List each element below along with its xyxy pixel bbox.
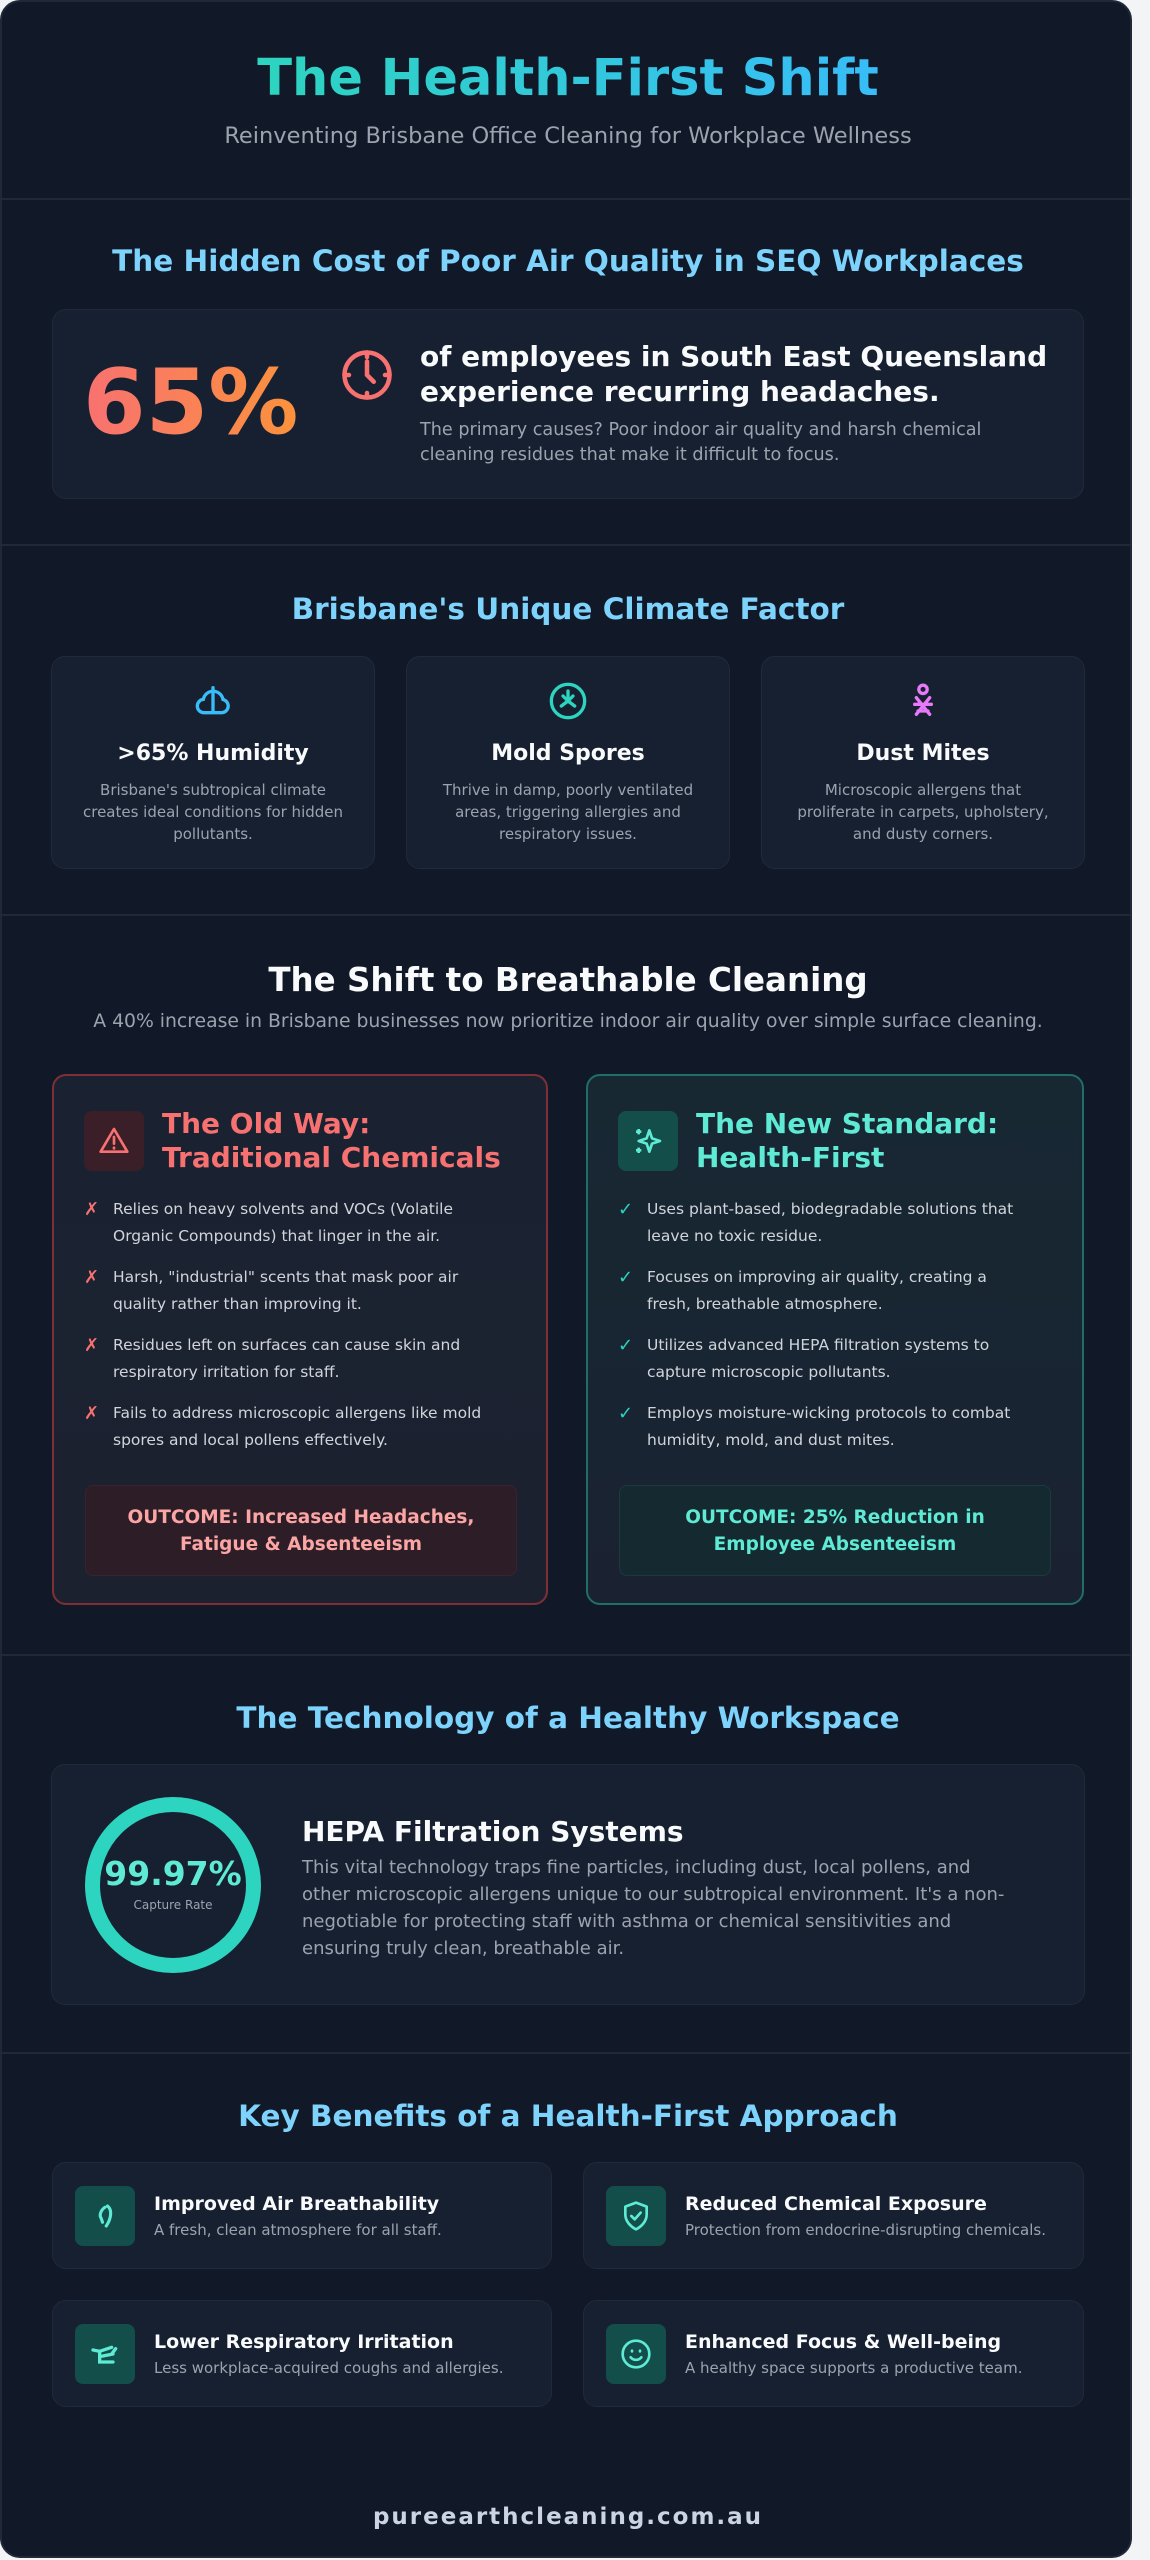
list old: Relies on heavy solvents and VOCs (Volatile Organic Compounds) that linger in the air. (113, 1200, 453, 1244)
benefit: respiratory: Lower Respiratory Irritation (154, 2331, 454, 2353)
heading: shift: The Shift to Breathable Cleaning (268, 961, 868, 999)
icon: hand (75, 2324, 135, 2384)
benefit: chemical (583, 2162, 1084, 2269)
icon: smile (606, 2324, 666, 2384)
outcome old: Fatigue & Absenteeism (180, 1534, 422, 1554)
icon: clock (342, 350, 392, 400)
outcome old (85, 1485, 517, 1576)
stat 65%: 65% (83, 350, 298, 455)
list new (618, 1199, 1013, 1448)
panel: old way: ✗ (84, 1403, 99, 1424)
description: The primary causes? Poor indoor air quality and harsh chemical cleaning residues that make it difficult to focus. (420, 420, 981, 465)
HEPA title: HEPA Filtration Systems (302, 1815, 684, 1848)
list new: Uses plant-based, biodegradable solutions that leave no toxic residue. (647, 1200, 1013, 1244)
benefit: air: A fresh, clean atmosphere for all staff. (154, 2221, 442, 2239)
panel: dust mites: Microscopic allergens that proliferate in carpets, upholstery, and dusty corners. (797, 781, 1049, 843)
icon: wind (75, 2186, 135, 2246)
panel: old way: ✗ (84, 1335, 99, 1356)
footer: pureearthcleaning.com.au (373, 2504, 763, 2530)
benefit: air: Improved Air Breathability (154, 2193, 439, 2215)
list old: Residues left on surfaces can cause skin and respiratory irritation for staff. (113, 1336, 460, 1380)
benefit: chemical: Protection from endocrine-disrupting chemicals. (685, 2221, 1046, 2239)
benefit: focus: A healthy space supports a productive team. (685, 2359, 1022, 2377)
panel: old way: ✗ (84, 1267, 99, 1288)
panel: old way (52, 1074, 548, 1605)
icon: warning (84, 1111, 144, 1171)
panel: mold: Mold Spores (491, 741, 645, 766)
HEPA text: This vital technology traps fine particles, including dust, local pollens, and other microscopic allergens unique to our subtropical environment. It's a non-negotiable for protecting staff with asthma or chemical sensitivities and ensuring truly clean, breathable air. (302, 1857, 1004, 1959)
icon: spores (550, 682, 586, 720)
list new: Employs moisture-wicking protocols to combat humidity, mold, and dust mites. (647, 1404, 1010, 1448)
ring chart (85, 1797, 261, 1973)
panel: HEPA (51, 1764, 1085, 2005)
headline: of employees in South East Queensland experience recurring headaches. (420, 340, 1047, 408)
list old (84, 1199, 481, 1448)
subtitle: Reinventing Brisbane Office Cleaning for Workplace Wellness (224, 123, 912, 149)
heading: technology: The Technology of a Healthy Workspace (236, 1701, 900, 1735)
icon: bug (913, 684, 933, 716)
benefit: focus (583, 2300, 1084, 2407)
icon: shield (606, 2186, 666, 2246)
subheading: A 40% increase in Brisbane businesses now prioritize indoor air quality over simple surface cleaning. (93, 1011, 1043, 1032)
heading: climate: Brisbane's Unique Climate Factor (292, 592, 844, 626)
heading: hidden cost: The Hidden Cost of Poor Air Quality in SEQ Workplaces (112, 244, 1024, 278)
heading old way (162, 1107, 501, 1174)
icon: sparkle (618, 1111, 678, 1171)
heading new: Health-First (696, 1141, 884, 1174)
outcome new (619, 1485, 1051, 1576)
list old: Fails to address microscopic allergens like mold spores and local pollens effectively. (113, 1404, 481, 1448)
panel: humidity: >65% Humidity (117, 741, 309, 766)
icon: cloud (196, 686, 230, 714)
panel: dust mites: Dust Mites (856, 741, 990, 766)
panel: new standard: ✓ (618, 1267, 633, 1288)
panel: mold (406, 656, 730, 869)
ring chart: 99.97% (104, 1854, 242, 1893)
panel: old way: ✗ (84, 1199, 99, 1220)
panel: stat (52, 309, 1084, 499)
list old: Harsh, "industrial" scents that mask poor air quality rather than improving it. (113, 1268, 458, 1312)
benefit: focus: Enhanced Focus & Well-being (685, 2331, 1001, 2353)
heading new (696, 1107, 998, 1174)
panel: dust mites (761, 656, 1085, 869)
panel: new standard: ✓ (618, 1199, 633, 1220)
list new: Utilizes advanced HEPA filtration systems to capture microscopic pollutants. (647, 1336, 989, 1380)
panel: humidity (51, 656, 375, 869)
benefit: chemical: Reduced Chemical Exposure (685, 2193, 987, 2215)
panel: humidity: Brisbane's subtropical climate creates ideal conditions for hidden pollutants. (83, 781, 343, 843)
list new: Focuses on improving air quality, creating a fresh, breathable atmosphere. (647, 1268, 987, 1312)
panel: new standard: ✓ (618, 1335, 633, 1356)
panel: new standard: ✓ (618, 1403, 633, 1424)
outcome new: Employee Absenteeism (714, 1534, 956, 1554)
heading old way: Traditional Chemicals (162, 1141, 501, 1174)
heading: benefits: Key Benefits of a Health-First Approach (238, 2099, 898, 2133)
benefit: air (52, 2162, 552, 2269)
benefit: respiratory (52, 2300, 552, 2407)
heading new: The New Standard: (696, 1107, 998, 1140)
panel: mold: Thrive in damp, poorly ventilated areas, triggering allergies and respiratory issues. (443, 781, 693, 843)
outcome new: OUTCOME: 25% Reduction in (685, 1506, 985, 1528)
benefit: respiratory: Less workplace-acquired coughs and allergies. (154, 2359, 503, 2377)
panel: new standard (586, 1074, 1084, 1605)
ring chart: Capture Rate (133, 1898, 213, 1912)
heading old way: The Old Way: (162, 1107, 370, 1140)
title: The Health-First Shift (257, 49, 879, 108)
outcome old: OUTCOME: Increased Headaches, (128, 1506, 474, 1528)
